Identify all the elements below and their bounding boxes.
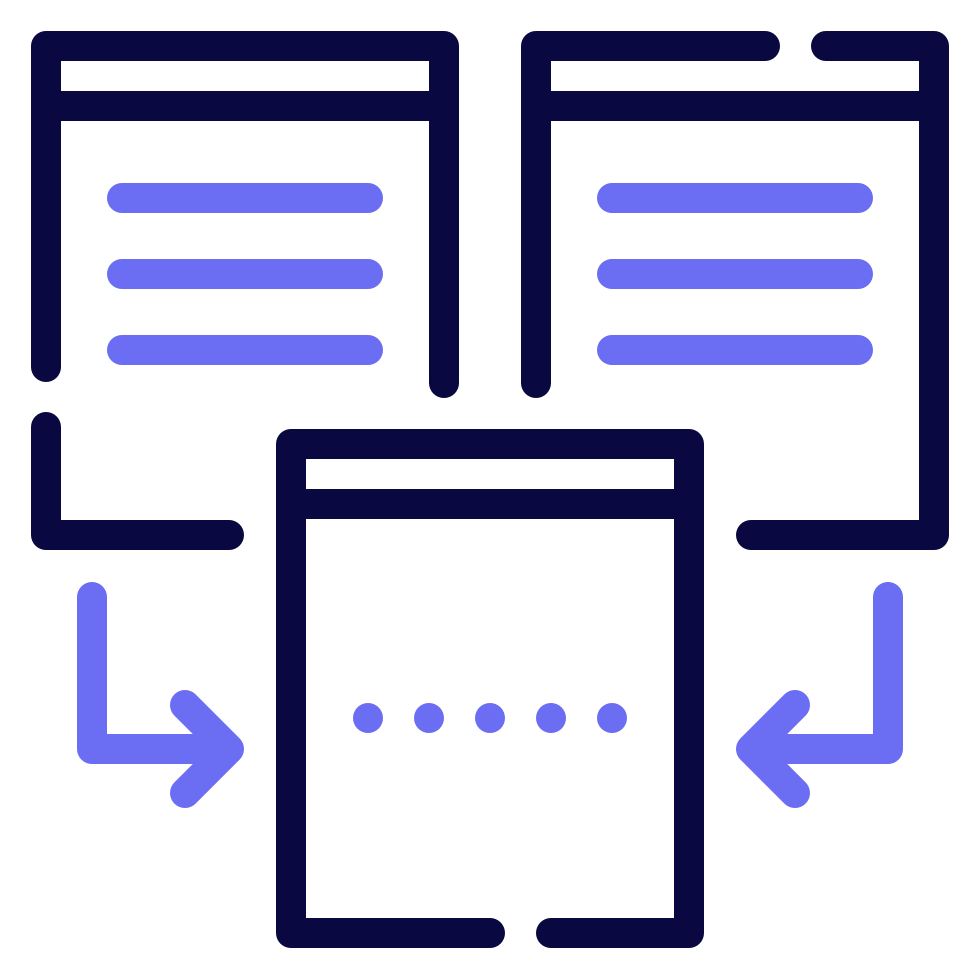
icon: bottom merged window: [291, 444, 689, 933]
icon: dots: [353, 703, 627, 733]
icon: right window text lines: [612, 198, 858, 350]
arrow: right to center: [751, 597, 888, 793]
arrow: left to center: [92, 597, 229, 793]
icon: left window: [46, 46, 444, 535]
icon: right window: [536, 46, 934, 535]
icon: left window text lines: [122, 198, 368, 350]
